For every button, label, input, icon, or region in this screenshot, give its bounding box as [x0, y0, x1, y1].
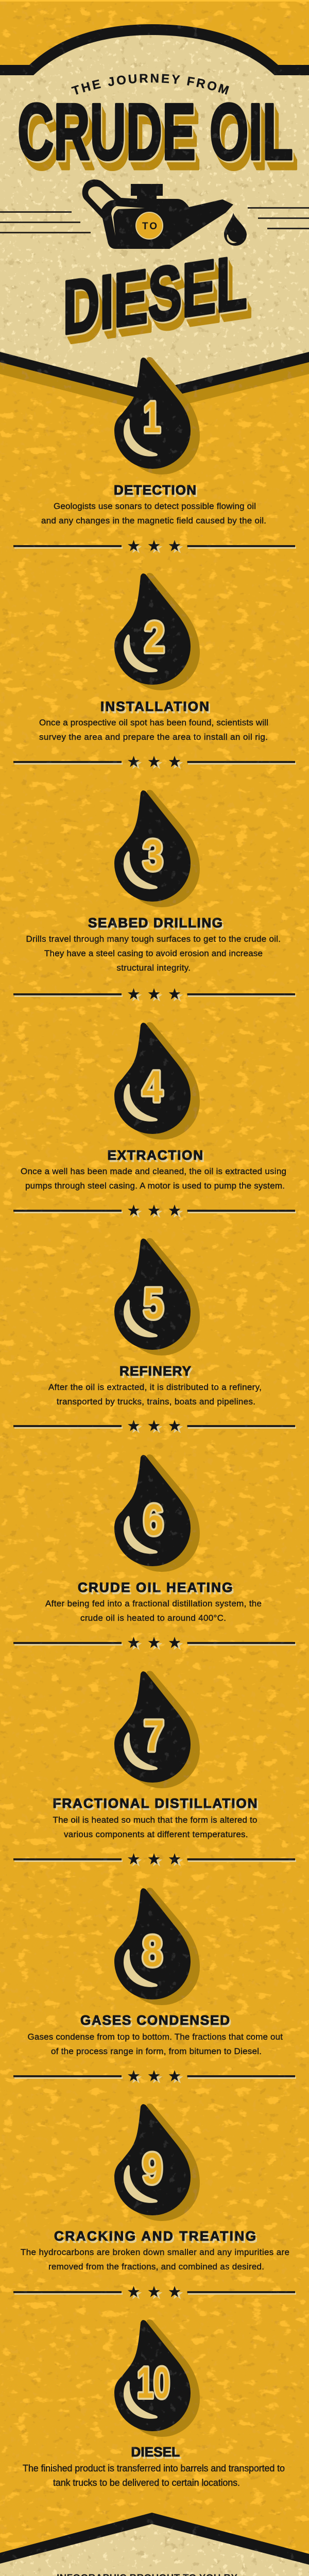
step 1: [13, 357, 296, 553]
icon: drop 1: 1: [143, 393, 161, 442]
heading: diesel: DIESEL: [131, 2444, 180, 2460]
text: installation: Once a prospective oil spot has been found, scientists will: [39, 718, 268, 727]
divider: [13, 2286, 296, 2299]
icon: drop 2: 2: [144, 613, 165, 662]
title: the journey from: THE JOURNEY FROM: [71, 74, 229, 95]
step 7: [13, 1671, 296, 1867]
icon: drop 4: 4: [142, 1062, 163, 1111]
step 2: [13, 573, 296, 769]
text: crude oil heating: crude oil is heated to around 400°C.: [80, 1613, 226, 1623]
icon: oil can: [82, 179, 247, 249]
icon: drop 8: 8: [142, 1926, 163, 1975]
divider: [13, 1420, 296, 1433]
divider: [13, 1205, 296, 1218]
icon: drop 4: [114, 1022, 200, 1140]
text: cracking and treating: [21, 2247, 289, 2272]
heading: installation: INSTALLATION: [100, 699, 209, 714]
icon: drop 3: [114, 790, 200, 907]
icon: drop 10: 10: [137, 2359, 170, 2408]
text: fractional distillation: various components at different temperatures.: [64, 1829, 248, 1839]
icon: drop 8: [114, 1888, 200, 2005]
heading: gases condensed: GASES CONDENSED: [80, 2012, 230, 2028]
step 9: [13, 2104, 296, 2299]
icon: drop 9: [114, 2104, 200, 2221]
divider: [13, 540, 296, 553]
text: gases condensed: [28, 2032, 283, 2056]
header panel: [0, 24, 309, 413]
icon: drop 6: [114, 1454, 200, 1572]
speed lines right: [248, 207, 309, 229]
text: extraction: [21, 1166, 286, 1191]
text: detection: and any changes in the magnetic field caused by the oil.: [41, 516, 266, 526]
footer panel: [0, 2513, 309, 2576]
text: gases condensed: Gases condense from top to bottom. The fractions that come out: [28, 2032, 283, 2042]
divider: [13, 988, 296, 1002]
step 6: [13, 1454, 296, 1650]
step 5: [13, 1238, 296, 1433]
heading: extraction: EXTRACTION: [107, 1147, 203, 1163]
step 4: [13, 1022, 296, 1218]
text: refinery: [48, 1382, 262, 1406]
text: cracking and treating: removed from the fractions, and combined as desired.: [48, 2262, 264, 2272]
icon: oil can: TO: [142, 221, 157, 232]
text: diesel: [23, 2463, 285, 2488]
icon: drop 1: [114, 357, 200, 474]
text: crude oil heating: After being fed into a fractional distillation system, the: [45, 1599, 262, 1608]
divider: [13, 1637, 296, 1650]
text: diesel: tank trucks to be delivered to certain locations.: [53, 2478, 240, 2488]
text: detection: Geologists use sonars to detect possible flowing oil: [54, 501, 256, 511]
icon: drop 9: 9: [142, 2144, 163, 2193]
text: fractional distillation: [53, 1815, 258, 1839]
text: installation: [39, 718, 268, 742]
heading: seabed drilling: SEABED DRILLING: [88, 915, 222, 930]
heading: crude oil heating: CRUDE OIL HEATING: [78, 1580, 233, 1595]
text: detection: [41, 501, 266, 526]
icon: drop 5: [114, 1238, 200, 1355]
text: cracking and treating: The hydrocarbons are broken down smaller and any impurities are: [21, 2247, 289, 2257]
icon: drop 2: [114, 573, 200, 690]
heading: fractional distillation: FRACTIONAL DISTILLATION: [53, 1795, 258, 1811]
icon: drop 10: [114, 2319, 200, 2437]
text: crude oil heating: [45, 1599, 262, 1623]
text: seabed drilling: They have a steel casing to avoid erosion and increase: [44, 948, 263, 958]
text: extraction: pumps through steel casing. A motor is used to pump the system.: [25, 1181, 285, 1191]
icon: drop 7: [114, 1671, 200, 1788]
icon: drop 5: 5: [143, 1279, 164, 1328]
text: fractional distillation: The oil is heated so much that the form is altered to: [53, 1815, 258, 1825]
text: gases condensed: of the process range in form, from bitumen to Diesel.: [51, 2046, 262, 2056]
icon: drop 6: 6: [143, 1495, 164, 1544]
text: diesel: The finished product is transferred into barrels and transported to: [23, 2463, 285, 2473]
step 8: [13, 1888, 296, 2083]
divider: [13, 756, 296, 769]
speed lines left: [0, 211, 91, 233]
text: extraction: Once a well has been made and cleaned, the oil is extracted using: [21, 1166, 286, 1176]
text: seabed drilling: Drills travel through many tough surfaces to get to the crude oil.: [26, 934, 281, 944]
step 10: [23, 2319, 285, 2488]
icon: drop 3: 3: [143, 831, 163, 879]
step 3: [13, 790, 296, 1002]
text: refinery: After the oil is extracted, it is distributed to a refinery,: [48, 1382, 262, 1392]
text: installation: survey the area and prepare the area to install an oil rig.: [39, 732, 268, 742]
divider: [13, 2070, 296, 2083]
heading: cracking and treating: CRACKING AND TREATING: [54, 2228, 256, 2244]
heading: detection: DETECTION: [114, 482, 196, 498]
text: seabed drilling: [26, 934, 281, 973]
text: seabed drilling: structural integrity.: [116, 963, 191, 973]
heading: refinery: REFINERY: [119, 1363, 191, 1379]
divider: [13, 1853, 296, 1867]
icon: drop 7: 7: [144, 1711, 164, 1760]
text: refinery: transported by trucks, trains, boats and pipelines.: [57, 1397, 255, 1406]
